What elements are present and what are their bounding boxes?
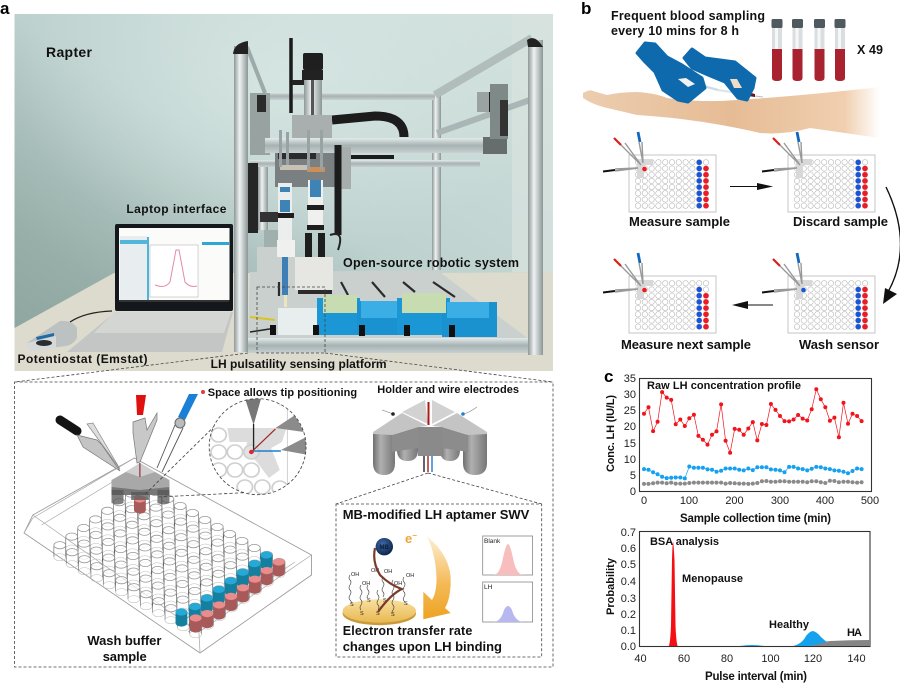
x axis title: Sample collection time (min) — [680, 513, 831, 525]
chart: Blank SWV: Blank — [484, 538, 501, 545]
well plate and holder — [24, 398, 312, 653]
caption: measure sample: Measure sample — [629, 214, 730, 229]
black cable — [332, 116, 404, 137]
y tick labels — [621, 527, 636, 653]
chart: pulse interval probability — [605, 527, 870, 683]
blue series — [644, 466, 862, 478]
OH and S labels: OH — [394, 581, 402, 587]
SWV caption: Electron transfer rate — [343, 624, 472, 638]
grey HA density — [810, 640, 870, 646]
deck plate with yellow wire — [250, 308, 317, 335]
y tick labels: 0.7 — [621, 527, 636, 539]
y axis title: Conc. LH (IU/L) — [605, 395, 617, 472]
right carriage — [477, 84, 508, 154]
gloved hands — [637, 43, 755, 102]
x tick labels: 120 — [804, 653, 822, 665]
OH and S labels: OH — [371, 568, 379, 574]
x tick labels — [634, 653, 866, 665]
front rail — [248, 338, 530, 353]
right post — [527, 38, 543, 355]
y tick labels: 25 — [624, 405, 636, 417]
plate rim — [24, 458, 312, 653]
grey rear box — [257, 247, 295, 273]
pipette modules — [277, 180, 340, 307]
label: wash buffer sample — [87, 633, 161, 664]
OH and S labels: OH — [362, 581, 370, 587]
caption: wash sensor: Wash sensor — [799, 337, 879, 352]
red series — [644, 389, 862, 453]
grey series — [644, 481, 862, 484]
panel: sensing platform detail — [14, 382, 553, 667]
label: wash buffer sample: Wash buffer — [87, 633, 161, 648]
y tick labels: 0 — [630, 486, 636, 498]
arm — [583, 87, 880, 138]
y tick labels: 0.5 — [621, 559, 636, 571]
heading: frequent blood sampling: Frequent blood sampling — [611, 9, 765, 23]
left post — [233, 41, 248, 352]
OH and S labels: OH — [384, 569, 392, 575]
electron transfer arrow — [423, 536, 451, 619]
step: measure sample — [603, 132, 716, 212]
methylene blue ball — [376, 538, 393, 555]
y tick labels: 20 — [624, 421, 636, 433]
x tick labels: 400 — [816, 495, 834, 507]
chart title: Raw LH concentration profile — [647, 380, 801, 392]
photo label: Rapter: Rapter — [46, 44, 93, 60]
methylene blue ball: MB — [380, 545, 389, 551]
photo label: Laptop interface: Laptop interface — [126, 202, 227, 216]
arrow: wash to next — [732, 301, 773, 309]
electrode holder small — [111, 463, 169, 504]
OH and S labels: S — [376, 611, 380, 617]
OH and S labels: OH — [406, 573, 414, 579]
OH and S labels: OH — [351, 572, 359, 578]
x tick labels: 100 — [680, 495, 698, 507]
SWV caption: changes upon LH binding — [343, 639, 502, 654]
large electrode holder — [373, 400, 487, 475]
dashed inset frame — [257, 287, 325, 353]
plate body — [24, 458, 312, 653]
gold electrode — [343, 599, 416, 625]
blue tip boxes — [273, 293, 497, 337]
heading: frequent blood sampling — [611, 9, 765, 38]
pink sample wells — [134, 495, 285, 633]
y tick labels: 0.3 — [621, 593, 636, 605]
step: measure next sample — [603, 253, 716, 333]
panel label c: c — [604, 367, 613, 386]
OH and S labels: S — [383, 598, 387, 604]
y tick labels: 0.2 — [621, 609, 636, 621]
blue small bump — [740, 645, 764, 646]
OH and S labels — [350, 568, 414, 618]
table — [14, 272, 553, 371]
x tick labels: 100 — [761, 653, 780, 665]
label: holder and wire electrodes: Holder and wire electrodes — [377, 384, 519, 396]
crossbar — [265, 138, 487, 153]
chart: Blank SWV — [483, 536, 533, 575]
photo background wall — [14, 14, 553, 328]
y tick labels: 0.6 — [621, 543, 636, 555]
x tick labels: 140 — [847, 653, 866, 665]
y tick labels — [624, 373, 636, 498]
syringe — [700, 85, 763, 97]
x tick labels: 300 — [771, 495, 789, 507]
x tick labels: 80 — [721, 653, 733, 665]
SWV heading: MB-modified LH aptamer SWV — [343, 507, 530, 522]
y tick labels: 0.1 — [621, 625, 636, 637]
thiol monolayer — [349, 575, 405, 612]
label: Menopause: Menopause — [682, 573, 743, 585]
y tick labels: 15 — [624, 438, 636, 450]
OH and S labels: S — [367, 598, 371, 604]
SWV caption — [343, 624, 502, 654]
OH and S labels: S — [391, 612, 395, 618]
arrow: measure to discard — [730, 183, 773, 190]
heading: frequent blood sampling: every 10 mins for 8 h — [611, 24, 739, 38]
Z carriage — [287, 35, 332, 140]
x tick labels: 40 — [634, 653, 647, 665]
lower black cable — [348, 155, 394, 159]
y axis title: Probability — [605, 557, 617, 615]
zoom guide lines — [14, 353, 553, 382]
step: wash sensor — [762, 253, 875, 333]
photo label: Open-source robotic system: Open-source robotic system — [343, 256, 519, 270]
label: tip positioning dot: Space allows tip positioning — [208, 387, 357, 399]
y tick labels: 0.0 — [621, 641, 636, 653]
SWV guides — [336, 473, 542, 504]
x tick labels: 60 — [678, 653, 690, 665]
panel: MB-modified LH aptamer SWV — [336, 504, 542, 657]
alligator clips — [60, 394, 198, 472]
y tick labels: 35 — [624, 373, 636, 385]
red menopause density — [669, 542, 678, 646]
aptamer strand — [374, 548, 402, 612]
magnifier guides — [145, 420, 258, 497]
x tick labels — [641, 495, 879, 507]
lower bar — [250, 160, 480, 167]
caption: measure next sample: Measure next sample — [621, 337, 751, 352]
panel: robotic system photo — [14, 14, 553, 371]
x tick labels: 200 — [725, 495, 744, 507]
arrow: discard to wash — [883, 187, 900, 304]
photo label: Potentiostat: Potentiostat (Emstat) — [18, 352, 148, 366]
label: wash buffer sample: sample — [103, 649, 147, 664]
blood tubes — [772, 19, 846, 81]
y tick labels: 0.4 — [621, 576, 636, 588]
chart: LH SWV — [483, 582, 533, 622]
OH and S labels: S — [404, 601, 408, 607]
y tick labels: 30 — [624, 389, 636, 401]
y tick labels: 10 — [624, 454, 636, 466]
blue healthy density — [793, 631, 827, 646]
blue wash wells — [176, 551, 272, 627]
x tick labels: 500 — [861, 495, 879, 507]
central assembly — [248, 130, 351, 235]
OH and S labels: S — [350, 602, 354, 608]
chart: LH SWV: LH — [484, 584, 493, 591]
label: X 49: X 49 — [857, 43, 883, 57]
y tick labels: 5 — [630, 470, 636, 482]
electron label: e — [405, 531, 412, 546]
step: discard sample — [762, 132, 875, 212]
wells — [54, 481, 285, 638]
robot frame back — [247, 38, 532, 270]
label: BSA analysis: BSA analysis — [650, 536, 719, 548]
deck plate — [248, 270, 530, 340]
magnifier circle — [209, 398, 308, 495]
chart: raw LH concentration profile — [605, 373, 879, 525]
label: HA: HA — [847, 627, 862, 639]
x tick labels: 0 — [641, 495, 647, 507]
OH and S labels: S — [360, 611, 364, 617]
x axis title: Pulse interval (min) — [705, 671, 807, 683]
photo label: LH pulsatility sensing platform: LH pulsatility sensing platform — [211, 357, 387, 371]
laptop — [67, 224, 233, 352]
caption: discard sample: Discard sample — [793, 214, 888, 229]
electron label: − — [412, 531, 417, 540]
potentiostat — [27, 311, 112, 351]
deck rails — [279, 282, 455, 297]
label: Healthy: Healthy — [769, 619, 810, 631]
